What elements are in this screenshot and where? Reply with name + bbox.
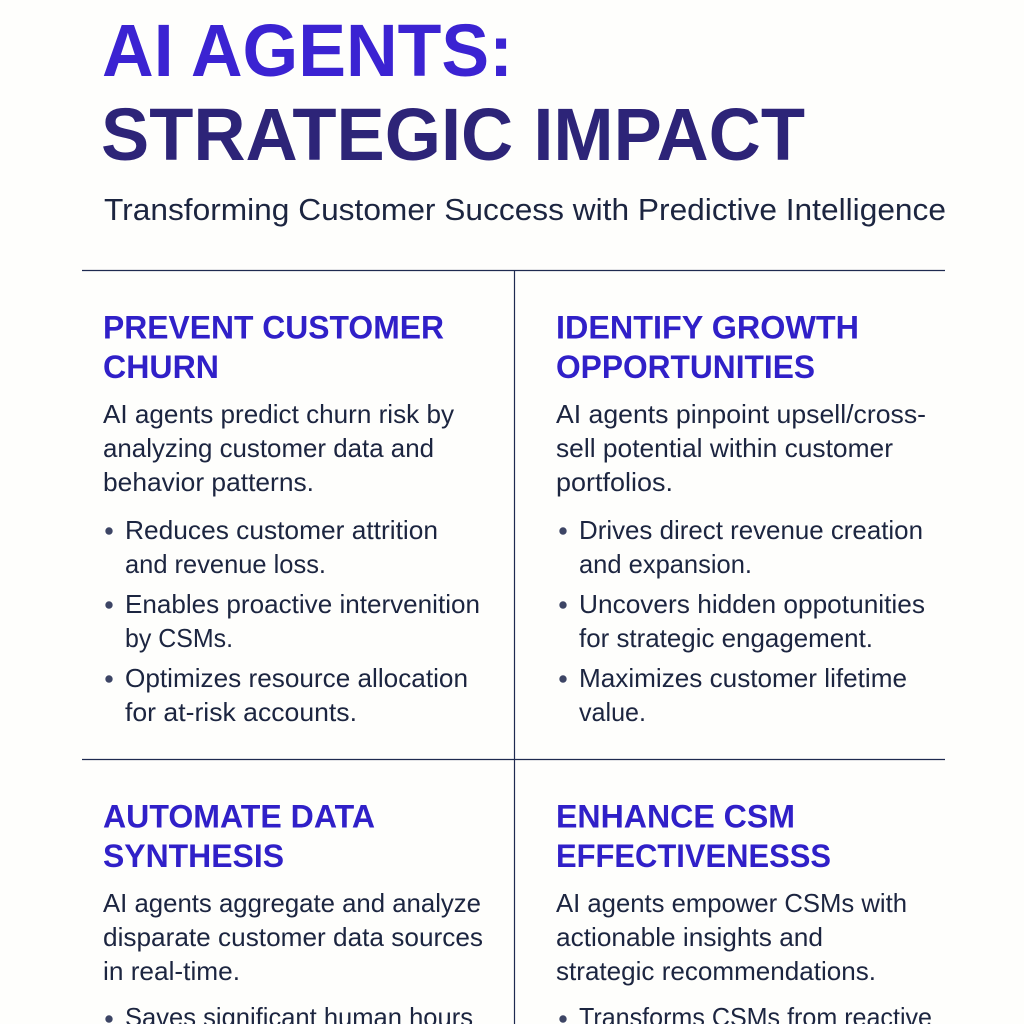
subtitle: Transforming Customer Success with Predictive Intelligence bbox=[104, 192, 946, 227]
bullet list: churn benefits: Enables proactive intervenition bbox=[125, 589, 480, 619]
bullet list: growth benefits: Drives direct revenue creation bbox=[579, 515, 923, 545]
title: STRATEGIC IMPACT bbox=[101, 93, 805, 176]
heading: enhance csm effectiveness: EFFECTIVENESSS bbox=[556, 838, 831, 874]
bullet list: churn benefits: Optimizes resource allocation bbox=[125, 663, 468, 693]
text block: csm description: actionable insights and bbox=[556, 922, 823, 952]
text block: growth description bbox=[556, 399, 926, 497]
bullet list: growth benefits: for strategic engagement. bbox=[579, 623, 873, 653]
text block: synthesis description: in real-time. bbox=[103, 956, 240, 986]
text block: synthesis description: AI agents aggregate and analyze bbox=[103, 888, 481, 918]
title bbox=[101, 9, 805, 176]
heading: automate data synthesis: SYNTHESIS bbox=[103, 838, 284, 874]
text block: churn description: analyzing customer data and bbox=[103, 433, 434, 463]
panel: identify growth opportunities bbox=[556, 310, 926, 727]
heading: identify growth opportunities: IDENTIFY GROWTH bbox=[556, 310, 859, 346]
bullet list: growth benefits: value. bbox=[579, 697, 646, 727]
heading: identify growth opportunities bbox=[556, 310, 859, 385]
text block: csm description: strategic recommendations. bbox=[556, 956, 876, 986]
title: AI AGENTS: bbox=[102, 9, 513, 92]
heading: prevent customer churn: CHURN bbox=[103, 349, 219, 385]
panel: automate data synthesis bbox=[103, 798, 483, 1024]
heading: prevent customer churn: PREVENT CUSTOMER bbox=[103, 310, 444, 346]
text block: churn description: AI agents predict churn risk by bbox=[103, 399, 454, 429]
panel: prevent customer churn bbox=[103, 310, 480, 727]
heading: enhance csm effectiveness bbox=[556, 798, 831, 874]
bullet list: growth benefits: Maximizes customer lifetime bbox=[579, 663, 907, 693]
heading: identify growth opportunities: OPPORTUNITIES bbox=[556, 349, 815, 385]
bullet list: churn benefits: and revenue loss. bbox=[125, 549, 326, 579]
text block: growth description: portfolios. bbox=[556, 467, 673, 497]
bullet list: growth benefits: and expansion. bbox=[579, 549, 752, 579]
heading: automate data synthesis bbox=[103, 798, 375, 874]
text block: csm description: AI agents empower CSMs with bbox=[556, 888, 907, 918]
heading: automate data synthesis: AUTOMATE DATA bbox=[103, 798, 375, 834]
bullet list: churn benefits: by CSMs. bbox=[125, 623, 233, 653]
panel: enhance csm effectiveness bbox=[556, 798, 932, 1024]
bullet list: churn benefits: Reduces customer attrition bbox=[125, 515, 438, 545]
text block: csm description bbox=[556, 888, 907, 986]
heading: prevent customer churn bbox=[103, 310, 444, 385]
text block: churn description bbox=[103, 399, 454, 497]
bullet list: growth benefits bbox=[559, 515, 925, 727]
text block: growth description: sell potential within customer bbox=[556, 433, 893, 463]
text block: churn description: behavior patterns. bbox=[103, 467, 314, 497]
bullet list: churn benefits: for at-risk accounts. bbox=[125, 697, 357, 727]
text block: growth description: AI agents pinpoint upsell/cross- bbox=[556, 399, 926, 429]
bullet list: churn benefits bbox=[105, 515, 480, 727]
text block: synthesis description: disparate customer data sources bbox=[103, 922, 483, 952]
text block: synthesis description bbox=[103, 888, 483, 986]
bullet list: growth benefits: Uncovers hidden oppotunities bbox=[579, 589, 925, 619]
heading: enhance csm effectiveness: ENHANCE CSM bbox=[556, 798, 795, 834]
